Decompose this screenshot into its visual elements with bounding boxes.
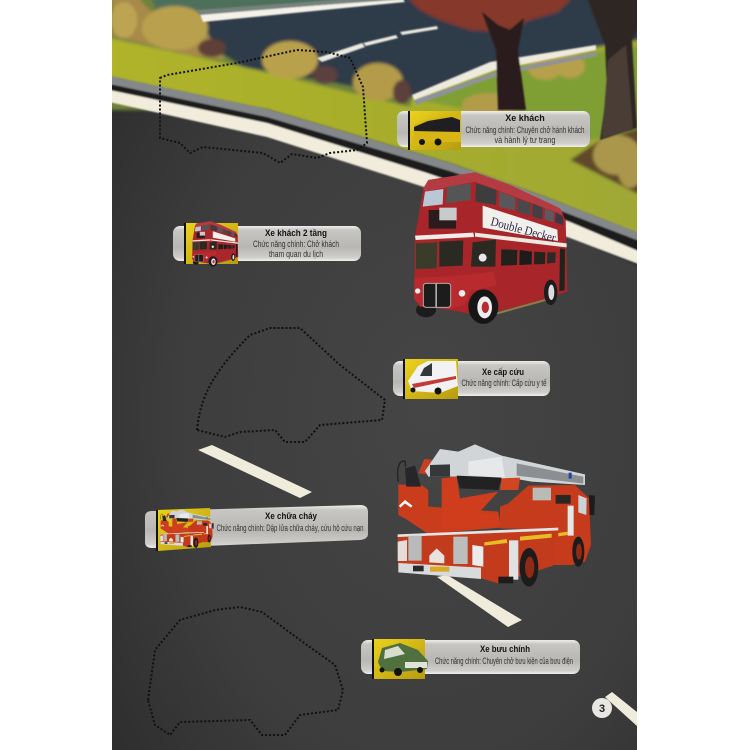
ambulance name: Xe cấp cứu [482,367,524,377]
roadside scenery [100,0,650,240]
page number: 3 [599,703,605,715]
thumbnail: fire engine [160,510,214,548]
label: ambulance [393,359,550,399]
dotted outline: ambulance [197,328,385,442]
coach description: và hành lý tư trang [494,135,556,145]
double-decker description: Chức năng chính: Chở khách [253,239,339,249]
thumbnail: ambulance [408,361,458,394]
kerb and white edge line [100,74,650,270]
label: double-decker [173,221,361,267]
thumbnail: coach [414,115,461,146]
coach name: Xe khách [505,113,545,123]
label: coach [397,111,590,150]
double-decker name: Xe khách 2 tầng [265,228,327,238]
coach description: Chức năng chính: Chuyên chở hành khách [466,125,584,135]
ambulance description: Chức năng chính: Cấp cứu y tế [462,378,546,388]
fire engine description: Chức năng chính: Dập lửa chữa cháy, cứu hộ cứu nạn [216,523,364,533]
thumbnail: postal van [378,643,428,676]
label: postal van [361,639,580,679]
road dashes [198,445,637,726]
page illustration [112,0,637,750]
dotted outline: coach [160,50,367,163]
fire engine name: Xe chữa cháy [265,511,317,521]
asphalt road background [112,0,637,750]
postal van description: Chức năng chính: Chuyên chở bưu kiện của bưu điện [435,656,573,666]
postal van name: Xe bưu chính [480,644,530,654]
double-decker bus [414,172,567,324]
fire engine [398,444,595,587]
dotted outline: postal van [148,607,343,735]
page number [592,698,612,718]
label: fire engine [145,505,368,551]
thumbnail: double-decker [192,221,238,267]
double-decker description: tham quan du lịch [269,249,323,259]
bus advert text: Double Decker [489,214,558,245]
